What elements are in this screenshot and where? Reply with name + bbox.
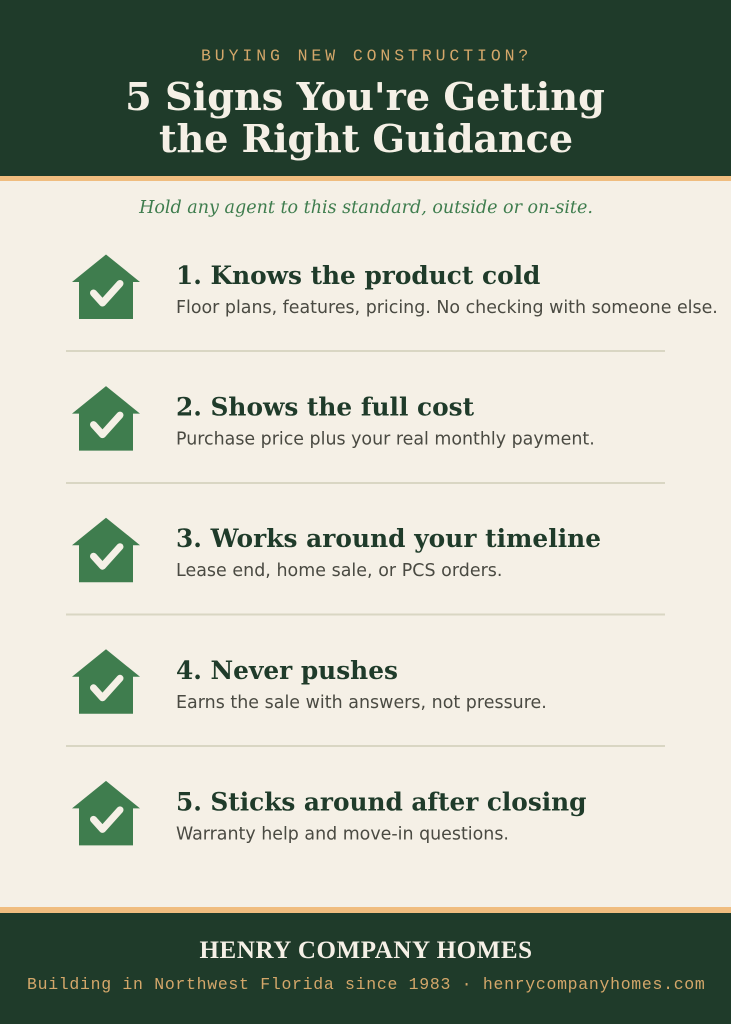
description 1: Floor plans, features, pricing. No checking with someone else.: [176, 298, 718, 318]
title: 5 Signs You're Getting: [125, 75, 605, 120]
heading 5: 5. Sticks around after closing: [176, 787, 586, 816]
item 4: [72, 649, 547, 714]
icon: house check: [72, 518, 140, 582]
item 1: [72, 254, 718, 319]
title: the Right Guidance: [159, 117, 573, 162]
icon: house check: [72, 781, 140, 845]
title: [125, 75, 605, 162]
description 5: Warranty help and move-in questions.: [176, 824, 509, 844]
eyebrow: BUYING NEW CONSTRUCTION?: [201, 46, 532, 66]
description 4: Earns the sale with answers, not pressure.: [176, 693, 547, 713]
heading 4: 4. Never pushes: [176, 656, 398, 685]
item 3: [72, 518, 601, 582]
tagline: Hold any agent to this standard, outside or on-site.: [138, 198, 593, 218]
heading 2: 2. Shows the full cost: [176, 393, 475, 422]
icon: house check: [72, 649, 140, 714]
footer band: [0, 907, 731, 1024]
item 5: [72, 781, 586, 845]
description 3: Lease end, home sale, or PCS orders.: [176, 561, 502, 581]
item 2: [72, 386, 595, 451]
heading 3: 3. Works around your timeline: [176, 524, 601, 553]
footer line: Building in Northwest Florida since 1983 · henrycompanyhomes.com: [27, 975, 706, 994]
description 2: Purchase price plus your real monthly payment.: [176, 430, 595, 450]
icon: house check: [72, 254, 140, 319]
header band: [0, 0, 731, 181]
icon: house check: [72, 386, 140, 451]
company name: HENRY COMPANY HOMES: [200, 937, 533, 964]
heading 1: 1. Knows the product cold: [176, 261, 540, 290]
